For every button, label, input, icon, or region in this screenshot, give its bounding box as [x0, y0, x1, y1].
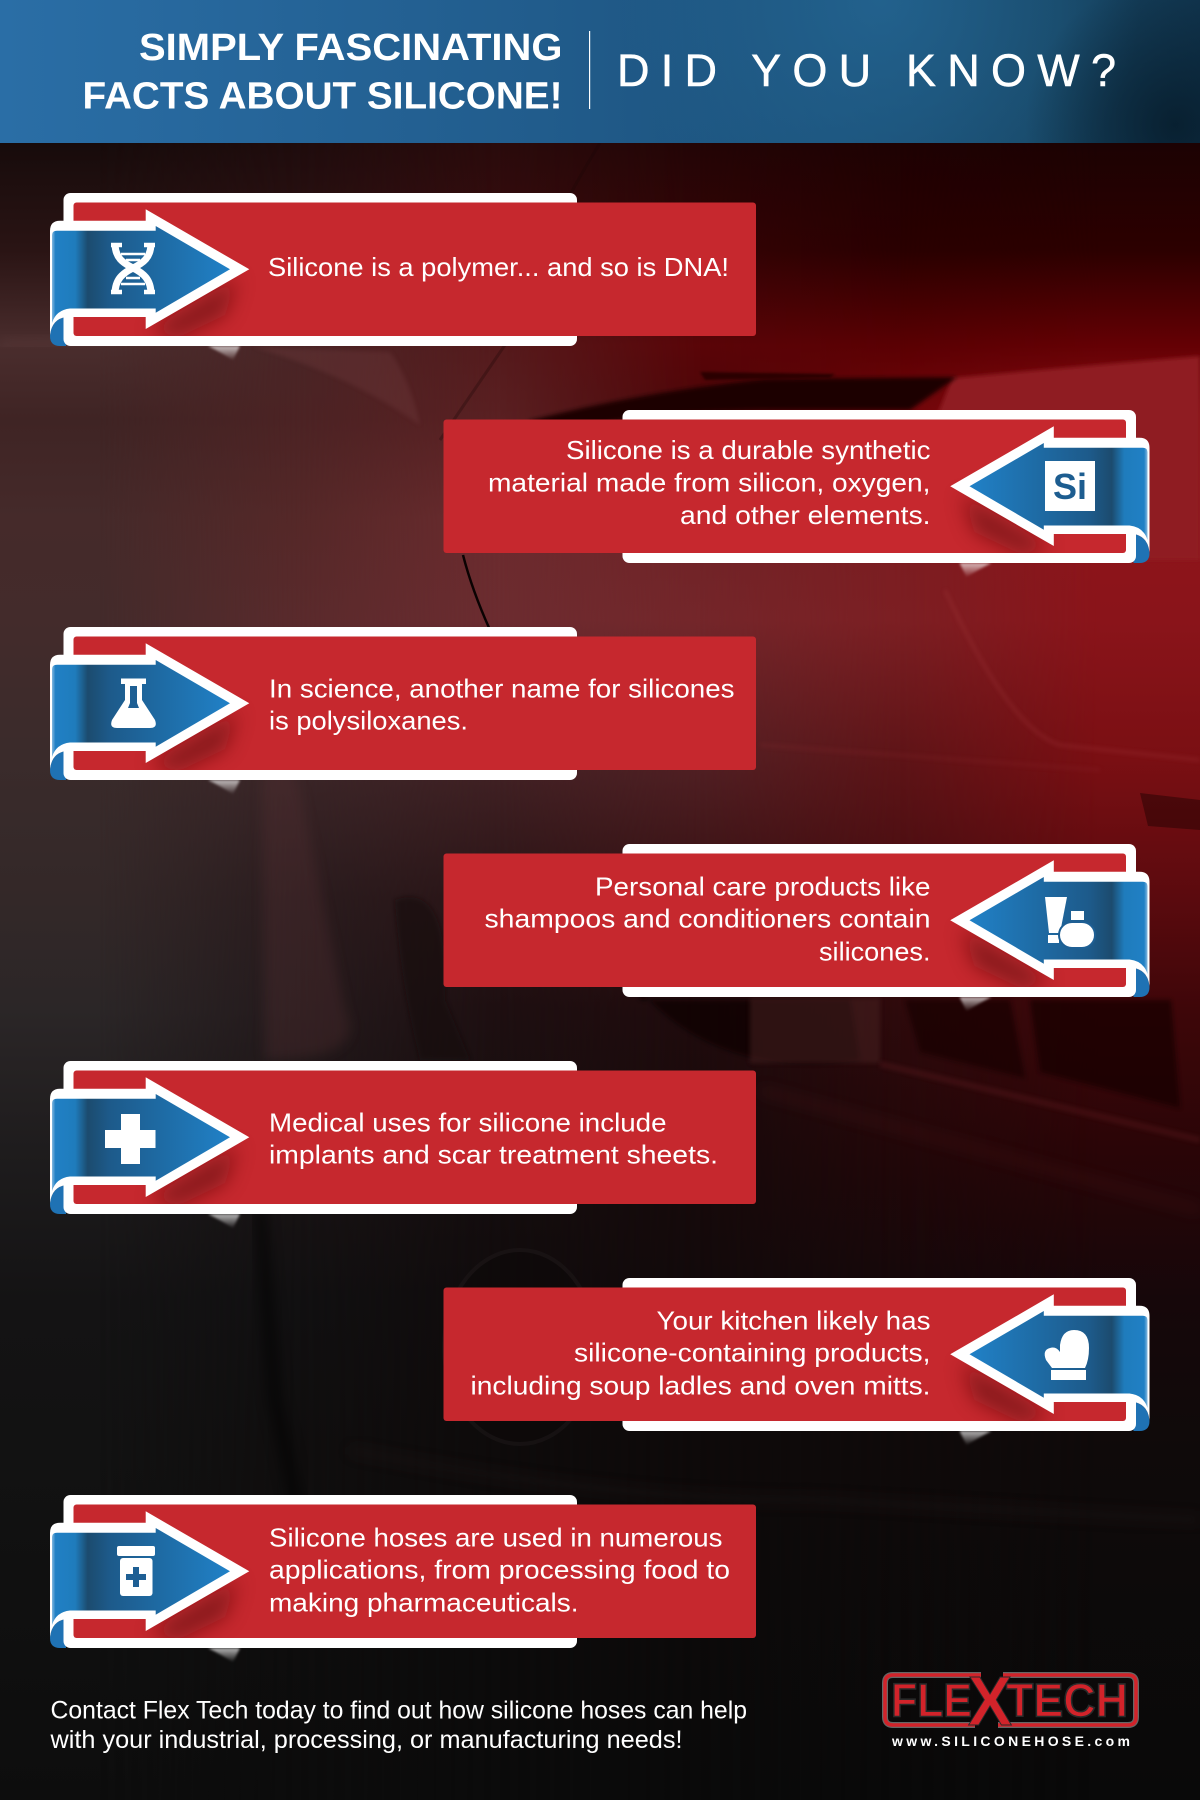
icon: Si element tile [1045, 461, 1095, 511]
background photo of car tinted red and black [0, 143, 1200, 1446]
text: kitchen [470, 1305, 930, 1400]
card 5: medical fact [50, 1061, 756, 1228]
logo: Flex Tech: TECH [1006, 1674, 1128, 1726]
icon: oven mitt [1045, 1330, 1089, 1380]
icon: medical plus [105, 1114, 156, 1164]
logo: Flex Tech: FLE [891, 1674, 972, 1726]
text: polysiloxanes [269, 674, 734, 736]
heading: simply fascinating facts: SIMPLY FASCINATING [139, 27, 562, 69]
text: personal care: silicones. [819, 936, 930, 966]
icon: flask [111, 678, 156, 728]
text: medical uses [269, 1108, 718, 1170]
text: kitchen: including soup ladles and oven mitts. [470, 1370, 930, 1400]
text: personal care [484, 871, 930, 966]
text: kitchen: Your kitchen likely has [656, 1305, 930, 1335]
card 6: kitchen fact [444, 1278, 1150, 1445]
heading: simply fascinating facts [82, 27, 562, 118]
icon: pill bottle [117, 1546, 155, 1596]
text: medical uses: implants and scar treatment sheets. [269, 1140, 718, 1170]
card 2: silicon composition fact [444, 410, 1150, 577]
text: hoses: making pharmaceuticals. [269, 1587, 578, 1617]
text: hoses: applications, from processing food to [269, 1555, 730, 1585]
text: durable synthetic [488, 435, 930, 530]
card 7: hoses fact [50, 1495, 756, 1662]
text: polymer: Silicone is a polymer... and so is DNA! [268, 252, 729, 282]
text: polysiloxanes: is polysiloxanes. [269, 706, 468, 736]
header banner [0, 0, 1200, 143]
text: durable synthetic: and other elements. [680, 500, 930, 530]
text: polysiloxanes: In science, another name for silicones [269, 674, 734, 704]
card 1: DNA fact [50, 193, 756, 360]
call to action text: Contact Flex Tech today to find out how silicone hoses can help [50, 1697, 747, 1725]
call to action text [49, 1697, 747, 1754]
heading: did you know: DID YOU KNOW? [617, 45, 1116, 96]
card 3: polysiloxanes fact [50, 627, 756, 794]
icon: shampoo tube and bottle [1045, 897, 1095, 948]
text: durable synthetic: Silicone is a durable synthetic [566, 435, 930, 465]
heading: simply fascinating facts: FACTS ABOUT SILICONE! [82, 76, 562, 118]
text: medical uses: Medical uses for silicone include [269, 1108, 666, 1138]
logo: Flex Tech [885, 1662, 1136, 1749]
icon: Si element tile: Si [1053, 466, 1087, 507]
text: personal care: shampoos and conditioners contain [484, 904, 930, 934]
text: durable synthetic: material made from silicon, oxygen, [488, 467, 930, 497]
text: hoses: Silicone hoses are used in numerous [269, 1522, 722, 1552]
text: hoses [269, 1522, 730, 1617]
logo: Flex Tech: www.SILICONEHOSE.com [891, 1733, 1130, 1749]
text: personal care: Personal care products like [595, 871, 930, 901]
call to action text: with your industrial, processing, or manufacturing needs! [49, 1726, 683, 1754]
logo: Flex Tech: X [968, 1662, 1012, 1740]
icon: DNA [111, 243, 155, 294]
text: kitchen: silicone-containing products, [574, 1338, 930, 1368]
card 4: personal care fact [444, 844, 1150, 1011]
